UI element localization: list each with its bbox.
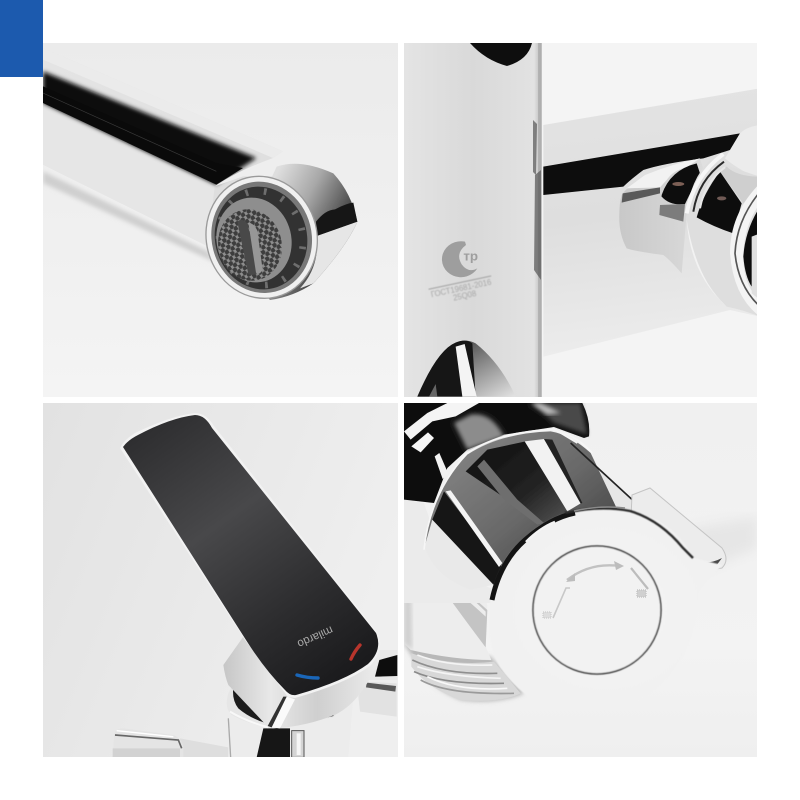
background pipe [702,522,754,558]
certification text: 25Q08 [452,289,477,303]
collar arcs [687,154,723,213]
light lower-left chrome [404,500,494,603]
rear fitting [367,650,397,680]
certification logo [442,241,478,277]
outer ring [730,186,757,314]
chrome body [404,403,644,603]
bright stripe [272,697,295,728]
dark upper panel [466,441,567,525]
left lower pipe [180,738,228,757]
lever tab [630,488,726,572]
vertical pipe [404,43,541,397]
panel: certification mark photo [404,43,760,397]
inner dial ring [533,546,661,674]
spout body [43,67,272,262]
blue corner block [0,0,43,77]
blue cold mark [297,675,318,678]
lever [120,413,380,698]
lever-side body [544,438,644,536]
spout dark reflection band [43,71,256,185]
chrome rim [205,176,318,299]
cylinder rim highlight [424,430,592,550]
cap chrome rim [492,513,575,600]
housing [223,637,380,728]
horizontal pipe and knob [543,88,760,357]
panel: aerator spout photo [43,43,398,397]
threaded connector [404,603,524,704]
certification text: ГОСТ19681-2016 [430,278,492,299]
panel: rotary cap photo [404,403,757,757]
honeycomb [218,209,282,281]
dial spout icons [553,588,570,618]
white stripe [525,439,581,511]
certification logo: тр [463,248,478,263]
top dark mass [404,403,589,503]
pipe dark reflection band [543,133,740,195]
cylinder [425,431,617,590]
pipe body [543,88,760,357]
cap disc [490,508,722,710]
faucet base and pipes [113,637,397,757]
shell [268,164,358,300]
black reflection left [432,491,501,585]
slotted ring [214,186,308,290]
dial arrow [567,565,620,580]
top dark reflection [470,43,532,66]
ball joint [690,172,757,316]
neck [227,683,353,727]
shoulder [619,158,707,273]
base body [228,697,353,757]
brand text: milardo [295,623,335,650]
panel: lever handle photo [43,403,398,757]
lower chrome spike [417,341,516,397]
far side reflection [725,126,757,176]
dark edge line of tab body [571,443,642,509]
red hot mark [351,645,360,659]
spout end shell and aerator [205,164,358,300]
inner boss [216,198,292,282]
